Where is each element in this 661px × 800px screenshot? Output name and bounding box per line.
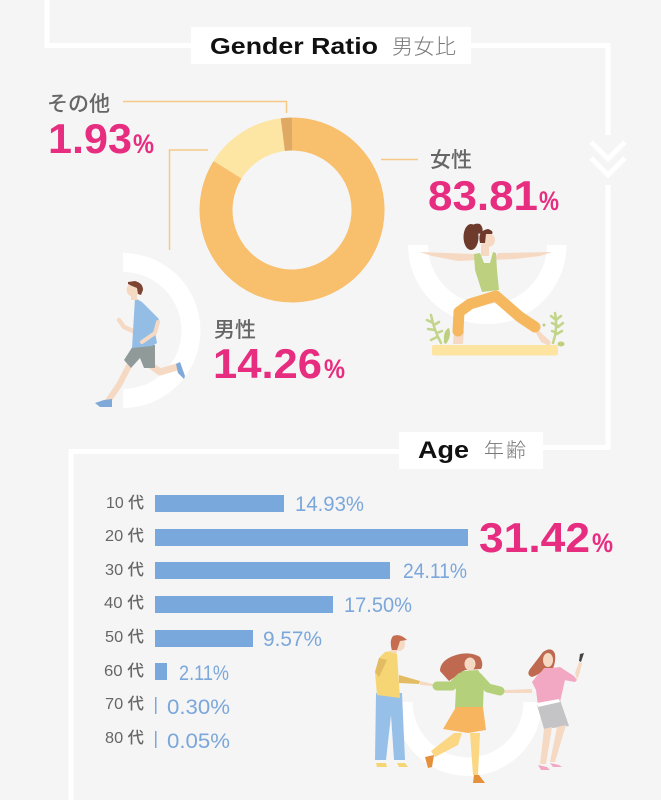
callout: male: 14.26 [213, 340, 322, 387]
row: 50s: 9.57% [263, 628, 322, 651]
row: 30s: 30 代 [105, 561, 144, 579]
row: 10s: 10 代 [106, 494, 144, 512]
row: 30s [105, 560, 467, 583]
row: 20s: % [592, 528, 613, 558]
heading: age [399, 432, 543, 469]
row: 50s: 50 代 [105, 628, 144, 646]
callout: other: % [133, 129, 154, 159]
callout: female: 83.81 [428, 172, 538, 219]
callout: female: 女性 [430, 149, 472, 172]
callout: other: 1.93 [48, 115, 132, 162]
bar chart: age distribution [104, 493, 613, 753]
icon: double chevron arrow [591, 142, 625, 175]
callout: other: その他 [47, 93, 110, 116]
row: 80s: 80 代 [105, 729, 144, 747]
icon: yoga woman [408, 224, 566, 356]
row: 70s: 0.30% [167, 696, 230, 719]
row: 10s: 14.93% [295, 493, 364, 516]
row: 40s: 40 代 [104, 594, 144, 612]
heading: gender ratio: 男女比 [392, 36, 456, 59]
callout: male: 男性 [214, 319, 256, 342]
row: 30s: 24.11% [403, 560, 467, 583]
row: 70s: 70 代 [105, 695, 144, 713]
callout: other [47, 93, 286, 162]
row: 70s [105, 695, 230, 719]
callout: male: % [324, 354, 345, 384]
callout: female: % [539, 186, 559, 216]
heading: age: Age [418, 437, 469, 464]
callout: female [381, 149, 559, 219]
row: 20s [105, 514, 613, 561]
row: 80s: 0.05% [167, 730, 230, 753]
row: 40s: 17.50% [344, 594, 412, 617]
heading: age: 年齢 [484, 439, 526, 462]
row: 60s [104, 662, 229, 685]
donut chart: gender ratio [216, 134, 368, 286]
row: 40s [104, 594, 412, 617]
row: 20s: 20 代 [105, 527, 144, 545]
callout: male [170, 150, 345, 387]
row: 60s: 2.11% [179, 662, 229, 685]
row: 80s [105, 729, 230, 753]
icon: three friends holding hands [375, 635, 584, 783]
row: 20s: 31.42 [479, 514, 590, 561]
icon: running man [95, 253, 200, 408]
row: 50s [105, 628, 322, 651]
row: 10s [106, 493, 364, 516]
heading: gender ratio [191, 27, 471, 64]
row: 60s: 60 代 [104, 662, 144, 680]
heading: gender ratio: Gender Ratio [210, 33, 378, 59]
